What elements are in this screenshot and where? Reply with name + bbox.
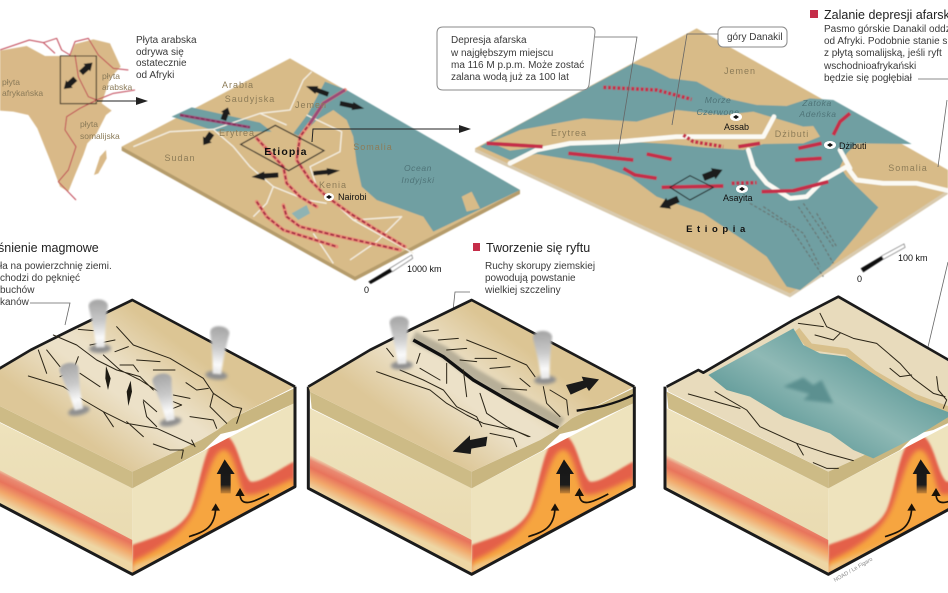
Africa landmass (0, 39, 121, 192)
Gulf of Aden and Indian Ocean (293, 82, 520, 232)
region labels: Ocean (404, 163, 432, 173)
leader line to block one (30, 303, 70, 325)
arrows of plate movement (453, 377, 599, 454)
scale label: 0 (857, 274, 862, 284)
lake (292, 205, 310, 220)
volcano plumes (388, 316, 556, 385)
region labels: Saudyjska (225, 94, 275, 104)
arrow toward Afar map (312, 125, 471, 142)
region labels: Indyjski (401, 175, 435, 185)
caption: Arabian plate: Płyta arabska (136, 35, 197, 46)
place labels: Zatoka (801, 98, 832, 108)
callout: Afar depression: w najgłębszym miejscu (450, 48, 553, 59)
sea and depression water (480, 63, 912, 290)
scale label (364, 264, 442, 295)
text: Afar flooding (823, 24, 948, 84)
scale label: 100 km (898, 253, 928, 263)
map: Afar depression (475, 28, 948, 297)
plate labels: płyta (102, 71, 120, 81)
leader line to flooded block (918, 79, 948, 347)
place labels: Adeńska (798, 109, 837, 119)
credit: NOAD / Le Figaro (833, 557, 874, 584)
Asayita marker (723, 185, 753, 203)
text: Afar flooding: będzie się pogłębiał (824, 73, 913, 84)
borders (133, 72, 413, 263)
caption: Arabian plate (136, 35, 197, 81)
caption: Arabian plate: od Afryki (136, 70, 174, 81)
cracks (377, 330, 568, 447)
dashed old faults (750, 203, 837, 277)
region labels: Jemen (295, 100, 327, 110)
flow arrow in water (783, 377, 833, 403)
arrows of plate movement (657, 164, 725, 213)
Djibouti city marker (824, 141, 867, 151)
place labels: Czerwone (696, 107, 740, 117)
scale label: 1000 km (407, 264, 442, 274)
Afar frame (241, 125, 324, 171)
callout: Afar depression: zalana wodą już za 100 lat (451, 72, 569, 83)
Assab marker (724, 113, 749, 132)
plate labels: somalijska (80, 131, 120, 141)
region labels: Kenia (319, 180, 347, 190)
plate labels: arabska (102, 82, 133, 92)
arrow toward regional map (97, 97, 148, 105)
text: rift formation: powodują powstanie (485, 273, 576, 284)
place labels: Dżibuti (775, 129, 809, 139)
Assab marker: Assab (724, 122, 749, 132)
volcano plumes (57, 299, 232, 428)
top surface (0, 300, 295, 472)
map slab (122, 147, 520, 281)
Madagascar fragment (462, 192, 480, 212)
place labels: Etiopia (686, 224, 750, 235)
flood water (708, 328, 948, 458)
text: magma uplift (0, 261, 112, 308)
plate labels: afrykańska (2, 88, 43, 98)
text: rift formation (484, 261, 595, 296)
text: magma uplift: ła na powierzchnię ziemi. (0, 261, 112, 272)
map: East Africa region (122, 58, 520, 295)
Nairobi marker: Nairobi (338, 192, 367, 202)
text: magma uplift: chodzi do pęknięć (0, 273, 80, 284)
Asayita marker: Asayita (723, 193, 753, 203)
plate labels: płyta (80, 119, 98, 129)
region labels: Somalia (353, 142, 393, 152)
cracks (28, 327, 242, 458)
caption: Arabian plate: odrywa się (136, 47, 184, 58)
heading: rift formation: Tworzenie się ryftu (486, 241, 590, 255)
callout: Danakil mountains: góry Danakil (727, 32, 783, 43)
scale bar (861, 244, 905, 272)
Red Sea (172, 107, 272, 132)
red rift segments (487, 87, 850, 192)
region labels: Erytrea (219, 128, 255, 138)
top surface (667, 297, 948, 472)
Nairobi marker (324, 192, 367, 202)
rift fissure (413, 337, 562, 428)
place labels: Jemen (724, 66, 756, 76)
text: Afar flooding: z płytą somalijską, jeśli ryft (824, 48, 942, 59)
land strip: Eritrea and Djibouti (490, 110, 820, 151)
region labels: Sudan (164, 153, 196, 163)
callout: Afar depression: Depresja afarska (451, 35, 527, 46)
cracks (688, 313, 947, 468)
place labels: Somalia (888, 163, 928, 173)
eastern edge fracture (577, 395, 633, 411)
block 1: magma uplift (0, 299, 295, 577)
plate boundaries (0, 38, 135, 200)
block 3: flooding (665, 297, 948, 584)
region labels (164, 80, 435, 190)
heading: magma uplift: śnienie magmowe (0, 241, 99, 255)
block 2: rift formation (308, 300, 634, 577)
map: Africa with tectonic plates (0, 35, 197, 200)
scale label: 0 (364, 285, 369, 295)
region labels: Arabia (222, 80, 254, 90)
text: Afar flooding: wschodnioafrykański (823, 61, 916, 72)
scale bar (368, 255, 413, 284)
Djibouti city marker: Dżibuti (839, 141, 867, 151)
arrows of plate movement (199, 82, 365, 181)
text: rift formation: wielkiej szczeliny (484, 285, 561, 296)
Madagascar (94, 150, 107, 175)
place labels: Erytrea (551, 128, 587, 138)
plate labels (2, 71, 133, 141)
arrows of plate movement (60, 59, 96, 93)
caption: Arabian plate: ostatecznie (136, 58, 187, 69)
study-area frame (60, 56, 96, 104)
text: magma uplift: kanów (0, 297, 30, 308)
region labels: Etiopia (264, 146, 308, 158)
border lines (510, 117, 948, 198)
place labels (551, 66, 928, 235)
text: magma uplift: buchów (0, 285, 35, 296)
top surface (308, 300, 634, 472)
plate labels: płyta (2, 77, 20, 87)
diamond frame (670, 176, 713, 200)
leader line to block two (452, 292, 470, 320)
bank shading (797, 330, 948, 412)
callout: Danakil mountains (672, 27, 787, 125)
callout: Afar depression: ma 116 M p.p.m. Może zostać (451, 60, 584, 71)
text: rift formation: Ruchy skorupy ziemskiej (485, 261, 595, 272)
place labels: Morze (705, 95, 731, 105)
scale label (857, 253, 928, 284)
map slab (475, 148, 948, 297)
rift lines (180, 90, 405, 250)
callout: Afar depression (437, 27, 637, 153)
